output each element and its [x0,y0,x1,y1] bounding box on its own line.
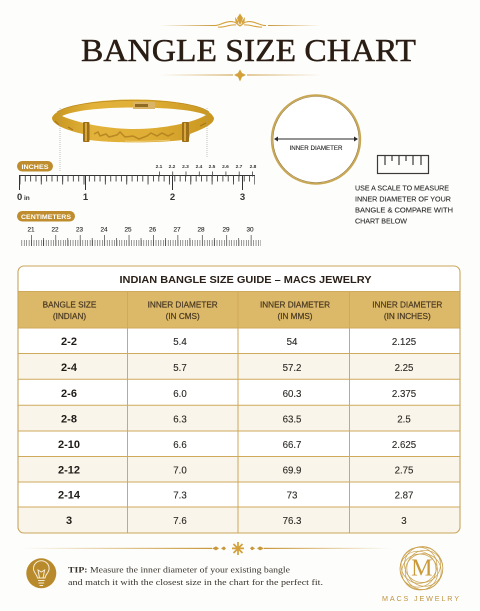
centimeters ruler: 29 [222,226,230,234]
table rows [58,336,416,527]
table rows: 7.0 [173,465,187,476]
table grid [18,266,460,533]
centimeters ruler: 21 [27,226,35,234]
inches label: INCHES [22,164,49,171]
column headings: (IN MMS) [277,312,313,321]
measuring instruction [355,184,453,226]
table header band [18,292,460,328]
centimeters ruler: 23 [76,226,83,234]
table rows: 7.3 [173,490,187,502]
table rows: 6.6 [173,440,187,451]
table rows: 6.0 [173,389,187,400]
table rows: 5.7 [173,363,187,374]
inches ruler: in [24,195,30,202]
table rows: 73 [287,490,297,502]
table rows: 3 [66,515,72,527]
logo: Macs Jewelry [382,546,459,603]
inches ruler [17,164,257,203]
table title: INDIAN BANGLE SIZE GUIDE – MACS JEWELRY [120,274,372,286]
tip text [68,564,323,587]
table rows: 2.125 [392,337,416,348]
centimeters ruler: 26 [149,226,156,234]
table rows: 2.25 [395,363,413,374]
measuring instruction: BANGLE & COMPARE WITH [355,206,453,214]
column headings: (IN INCHES) [384,312,431,321]
table rows: 2-10 [58,439,80,451]
logo: Macs Jewelry: MACS JEWELRY [382,594,459,603]
icon: light bulb [26,558,56,588]
column headings: INNER DIAMETER [260,301,330,310]
table rows: 60.3 [283,389,301,400]
inches ruler: 2.7 [236,164,243,170]
inches ruler: 2.4 [196,164,203,170]
table rows: 7.6 [173,516,187,527]
logo: Macs Jewelry: M [411,556,432,582]
centimeters ruler: 24 [100,226,108,234]
title: BANGLE SIZE CHART [81,32,416,68]
table rows: 2-8 [61,414,77,426]
centimeters ruler: 25 [124,226,132,234]
inner diameter diagram: INNER DIAMETER [290,146,343,152]
inches ruler: 2.6 [222,164,229,170]
column headings: INNER DIAMETER [372,301,442,310]
inner diameter diagram [272,95,360,184]
inches ruler: 2.2 [169,164,176,170]
inches ruler: 2.1 [156,164,163,170]
alternating rows [18,354,460,533]
table rows: 2.75 [395,465,413,476]
column headings: (IN CMS) [166,312,200,321]
table rows: 63.5 [283,415,301,426]
tip text: and match it with the closest size in the chart for the perfect fit. [68,577,323,587]
table rows: 6.3 [173,415,187,426]
column headings [43,301,442,321]
inches ruler: 2.5 [209,164,216,170]
table rows: 3 [401,516,407,527]
inches ruler: 3 [240,192,245,203]
inches ruler: 2.8 [250,164,257,170]
table rows: 2-14 [58,490,81,502]
table rows: 2.375 [392,389,416,400]
centimeters ruler: 30 [246,226,254,234]
inches label [17,161,53,172]
table rows: 2-12 [58,464,80,476]
centimeters ruler: 22 [51,226,59,234]
table rows: 2.5 [397,415,411,426]
centimeters label [17,211,75,222]
table rows: 69.9 [283,465,301,476]
table rows: 2-2 [61,336,77,348]
column headings: INNER DIAMETER [148,301,218,310]
table rows: 66.7 [283,440,301,451]
table rows: 2.625 [392,440,416,451]
tip text: TIP: Measure the inner diameter of your existing bangle [68,564,290,574]
measuring instruction: CHART BELOW [355,216,407,226]
measuring instruction: USE A SCALE TO MEASURE [355,184,449,192]
bottom title ornament [160,70,322,82]
centimeters ruler: 28 [197,226,205,234]
inches ruler: 2.3 [182,164,189,170]
table rows: 2-4 [61,362,78,374]
panel: size table [18,266,460,533]
bangle photo [52,100,214,142]
table rows: 5.4 [173,337,187,348]
inches ruler: 1 [83,192,89,203]
table rows: 76.3 [283,516,301,527]
icon: scale ruler [378,156,428,174]
inches ruler: 0 [17,192,22,203]
footer ornament [22,542,390,555]
measuring instruction: INNER DIAMETER OF YOUR [355,194,451,204]
table rows: 2-6 [61,388,77,400]
column headings: (INDIAN) [53,312,86,321]
top ornament [160,14,320,27]
table rows: 57.2 [283,363,301,374]
centimeters label: CENTIMETERS [21,214,71,221]
table rows: 2.87 [395,490,413,502]
column headings: BANGLE SIZE [43,301,97,310]
table rows: 54 [287,337,298,348]
centimeters ruler: 27 [173,226,181,234]
centimeters ruler [22,226,261,243]
guide lines [60,108,207,171]
inches ruler: 2 [170,192,175,203]
